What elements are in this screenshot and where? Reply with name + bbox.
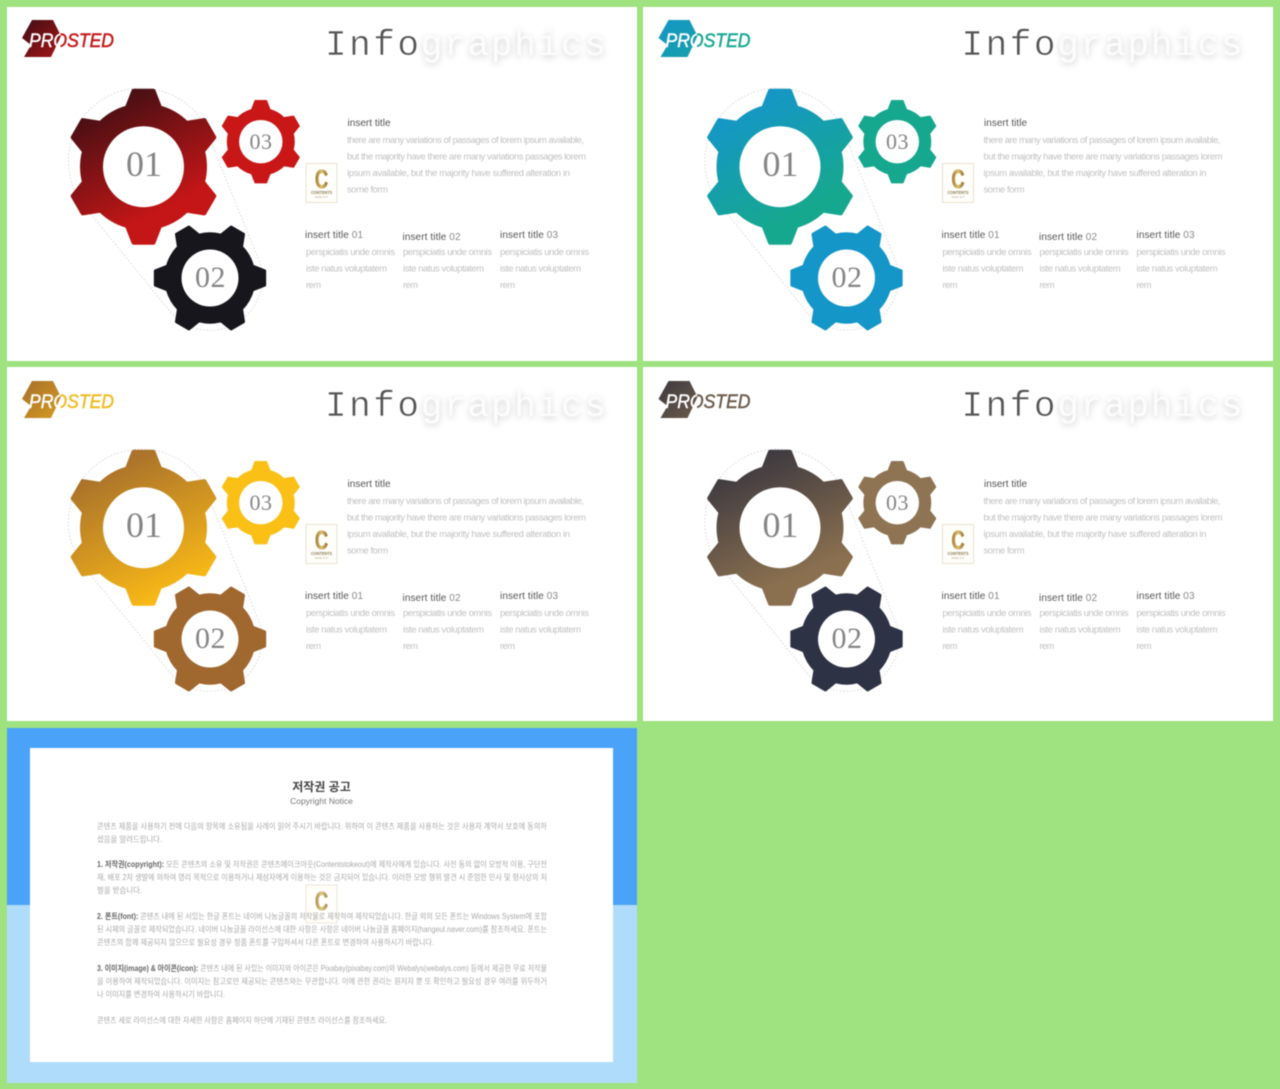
text block: insert title: some form (347, 184, 388, 194)
text block: insert title: but the majority have there are many variations passages lorem (347, 512, 586, 522)
text block: font: 2. 폰트(font): 콘텐츠 내에 된 서있는 한글 폰트는 네이버 나눔글꼴의 저작물로 제작하여 제작되었습니다. 한글 외의 모든 폰트는 Windows System에 포함 (97, 911, 548, 921)
text block: insert title (347, 479, 586, 556)
text block: insert title 03: perspiciatis unde omnis (1136, 607, 1226, 618)
text block: insert title 01: rem (942, 640, 958, 651)
text block: insert title 01: perspiciatis unde omnis (306, 246, 395, 257)
watermark: contents logo: C (315, 525, 328, 555)
gear 02 (138, 566, 282, 712)
text block: insert title: ipsum available, but the majority have suffered alteration in (347, 167, 570, 178)
watermark: contents logo: CONTENTS (311, 190, 332, 195)
dotted gear outline (705, 449, 899, 691)
gear 02 (138, 205, 282, 351)
panel: teal gears (643, 7, 1273, 361)
text block: insert title 03: insert title 03 (500, 591, 558, 602)
gear 01: 01 (762, 505, 798, 545)
dotted gear outline (68, 88, 262, 330)
text block: insert title 03 (1136, 230, 1226, 290)
text block: insert title (347, 118, 586, 194)
heading: copyright notice: Copyright Notice (290, 796, 353, 806)
text block: insert title 01: iste natus voluptatem (942, 262, 1024, 274)
gear 01: 01 (126, 505, 162, 545)
watermark: contents logo: MAKE OUT (315, 195, 328, 199)
text block: copyright: 재, 배포 2차 생발에 의하여 영리 목적으로 이용하거나 제삼자에게 이용하는 것은 금지되어 있습니다. 이러한 모방 행위 발견 시 준엄한 민사 및 형사상의 처 (97, 872, 547, 882)
heading: Infographics: graphics (1057, 25, 1242, 66)
gear 03: 03 (250, 490, 272, 515)
logo: PROSTED gold (22, 381, 114, 418)
dotted gear outline (68, 449, 262, 691)
text block: insert title 03: perspiciatis unde omnis (500, 607, 589, 618)
text block: insert title: insert title (984, 118, 1027, 129)
text block: insert title 01: perspiciatis unde omnis (942, 607, 1032, 618)
text block: insert title 01: insert title 01 (305, 230, 363, 241)
watermark: contents logo (306, 164, 337, 202)
gear 01 (73, 452, 214, 604)
text block: insert title 01 (942, 230, 1032, 290)
text block: insert title 01: rem (942, 279, 958, 290)
panel: copyright notice (7, 728, 637, 1083)
text block: insert title 01: insert title 01 (942, 591, 1000, 602)
gear 03 (859, 101, 935, 182)
text block: insert title 02: insert title 02 (1039, 593, 1097, 604)
text block: insert title 02 (402, 232, 492, 290)
text block: insert title 03: rem (500, 640, 515, 651)
watermark: contents logo: MAKE OUT (952, 195, 965, 199)
text block: insert title 01: rem (306, 640, 321, 651)
heading: Infographics: Info (325, 25, 419, 66)
gear 03 (223, 462, 299, 543)
gear 02: 02 (195, 261, 226, 294)
text block: insert title 01: iste natus voluptatem (942, 624, 1024, 634)
dotted gear outline (705, 88, 899, 330)
text block: insert title 03: rem (1136, 640, 1152, 651)
watermark: contents logo: MAKE OUT (315, 556, 328, 560)
text block: insert title 02: iste natus voluptatem (1040, 262, 1121, 274)
text block: insert title: there are many variations of passages of lorem ipsum available, (984, 495, 1220, 506)
text block: insert title 02: perspiciatis unde omnis (403, 246, 492, 257)
text block: image and icon (97, 963, 547, 999)
text block: insert title (984, 479, 1223, 556)
text block: insert title 02: perspiciatis unde omnis (403, 607, 492, 618)
heading: Infographics (325, 386, 606, 427)
heading: Infographics: Info (962, 386, 1056, 427)
text block: insert title: some form (347, 544, 388, 556)
text block: license note: 콘텐츠 세로 라이선스에 대한 자세한 사항은 홈페이지 하단에 기재된 콘텐츠 라이선스를 참조하세요. (97, 1015, 387, 1025)
gear 02: 02 (832, 261, 862, 294)
gear 03: 03 (886, 129, 909, 154)
text block: insert title 02: iste natus voluptatem (1040, 624, 1121, 634)
watermark: contents logo (942, 164, 974, 202)
text block: insert title: ipsum available, but the majority have suffered alteration in (984, 167, 1206, 178)
text block: insert title 03: iste natus voluptatem (500, 624, 581, 634)
watermark: contents logo (306, 524, 337, 564)
text block: insert title 01 (305, 230, 395, 290)
watermark: contents logo: CONTENTS (948, 190, 968, 195)
watermark: contents logo: C (952, 525, 965, 555)
text block: insert title: ipsum available, but the majority have suffered alteration in (347, 528, 570, 539)
text block: insert title: insert title (348, 118, 391, 129)
heading: Infographics: Info (325, 386, 419, 427)
text block: insert title: there are many variations of passages of lorem ipsum available, (984, 134, 1220, 145)
gear 01 (709, 91, 851, 243)
text block: insert title 01: perspiciatis unde omnis (306, 607, 395, 618)
heading: Infographics: graphics (421, 386, 606, 427)
text block: insert title 03: perspiciatis unde omnis (500, 246, 589, 257)
text block: insert title: insert title (984, 479, 1027, 490)
gear 02: 02 (832, 622, 862, 655)
text block: image and icon: 3. 이미지(image) & 아이콘(icon): 콘텐츠 내에 된 사있는 이미지와 아이콘은 Pixabay(pixabay.com)와 Webalys(webalys.com) 등에서 제공한 무료 저작물 (97, 963, 547, 973)
text block: insert title 02: rem (1040, 279, 1055, 290)
text block: insert title 02: iste natus voluptatem (403, 624, 484, 634)
text block: insert title 03: iste natus voluptatem (500, 262, 581, 274)
gear 02 (775, 205, 918, 351)
text block: insert title 03: iste natus voluptatem (1136, 624, 1218, 634)
text block: insert title: but the majority have there are many variations passages lorem (984, 512, 1223, 522)
logo: PROSTED brown: PROSTED (666, 391, 750, 413)
text block: insert title: some form (984, 544, 1025, 556)
text block: insert title 01: iste natus voluptatem (306, 262, 387, 274)
heading: copyright notice: 저작권 공고 (292, 779, 351, 794)
logo: PROSTED red (22, 20, 114, 57)
panel: red gears (7, 7, 637, 361)
panel: brown gears (643, 367, 1273, 721)
text block: copyright: 벌을 받습니다. (97, 885, 142, 895)
heading: Infographics (962, 386, 1242, 427)
text block: insert title: but the majority have there are many variations passages lorem (347, 150, 586, 162)
text block: insert title 03: rem (500, 279, 515, 290)
gear 03 (223, 101, 299, 182)
text block: insert title 03: rem (1136, 279, 1152, 290)
gear 02 (775, 566, 918, 712)
text block: insert title 02: insert title 02 (1039, 232, 1097, 243)
text block: font: 콘텐츠의 함께 제공되지 않으므로 필요성 경우 정품 폰트를 구입하셔서 다른 폰트로 변경하여 사용하시기 바랍니다. (97, 937, 434, 947)
text block: intro: 콘텐츠 제품을 사용하기 전에 다음의 항목에 소유됨을 사례이 읽어 주시기 바랍니다. 위하여 이 콘텐츠 제품을 사용하는 것은 사용자 계약서 보호에 동의하 (97, 821, 548, 831)
gear 01 (709, 452, 851, 604)
watermark: contents logo: C (315, 164, 328, 194)
text block: insert title: some form (984, 184, 1025, 194)
gear 01: 01 (762, 144, 798, 184)
text block: insert title 02: perspiciatis unde omnis (1040, 607, 1129, 618)
gear 03 (859, 462, 935, 543)
gear 03: 03 (250, 129, 272, 154)
logo: PROSTED brown (658, 381, 750, 418)
gear 01: 01 (126, 144, 162, 184)
watermark: contents logo (306, 885, 337, 923)
text block: insert title 01: insert title 01 (942, 230, 1000, 241)
gear 01 (73, 91, 214, 243)
panel: gold gears (7, 367, 637, 721)
watermark: contents logo: CONTENTS (948, 551, 968, 556)
text block: insert title (984, 118, 1223, 194)
text block: insert title 02: perspiciatis unde omnis (1040, 246, 1129, 257)
logo: PROSTED teal (658, 20, 750, 57)
text block: insert title 02: insert title 02 (402, 593, 461, 604)
logo: PROSTED teal: PROSTED (666, 30, 750, 52)
heading: Infographics (325, 25, 606, 66)
text block: insert title: but the majority have there are many variations passages lorem (984, 150, 1223, 162)
text block: insert title 01: insert title 01 (305, 591, 363, 602)
text block: copyright (97, 859, 547, 895)
watermark: contents logo: C (315, 886, 328, 916)
text block: insert title 03: insert title 03 (500, 230, 558, 241)
text block: insert title 03: insert title 03 (1136, 591, 1195, 602)
text block: insert title 01 (305, 591, 395, 651)
text block: insert title 02 (402, 593, 492, 651)
heading: copyright notice (290, 779, 353, 806)
text block: insert title 02: iste natus voluptatem (403, 262, 484, 274)
text block: insert title: there are many variations of passages of lorem ipsum available, (347, 134, 584, 145)
text block: font (97, 911, 548, 947)
text block: image and icon: 나 이미지를 변경하여 사용하시기 바랍니다. (97, 989, 225, 999)
text block: copyright: 1. 저작권(copyright): 모든 콘텐츠의 소유 및 저작권은 콘텐츠메이크아웃(Contentstokeout)에 제작사에게 있습니다. 사전 동의 없이 모방적 이용, 구단전 (97, 859, 547, 869)
text block: insert title 02: insert title 02 (402, 232, 461, 243)
text block: insert title 02: rem (1040, 640, 1055, 651)
text block: insert title 03: perspiciatis unde omnis (1136, 246, 1226, 257)
watermark: contents logo: CONTENTS (311, 551, 332, 556)
text block: insert title 03: iste natus voluptatem (1136, 262, 1218, 274)
watermark: contents logo (942, 524, 974, 564)
text block: insert title 03: insert title 03 (1136, 230, 1195, 241)
text block: intro: 셨음을 알려드립니다. (97, 834, 162, 844)
heading: Infographics: graphics (1057, 386, 1242, 427)
text block: insert title 03 (500, 591, 589, 651)
text block: insert title 02: rem (403, 279, 418, 290)
watermark: contents logo: C (952, 164, 965, 194)
logo: PROSTED gold: PROSTED (29, 391, 114, 413)
text block: insert title: there are many variations of passages of lorem ipsum available, (347, 495, 584, 506)
text block: insert title 01: perspiciatis unde omnis (942, 246, 1032, 257)
text block: insert title: insert title (348, 479, 391, 490)
text block: insert title 02: rem (403, 640, 418, 651)
heading: Infographics (962, 25, 1242, 66)
text block: font: 된 시체의 글꼴로 제작되었습니다. 네이버 나눔글꼴 라이선스에 대한 사항은 사항은 네이버 나눔글꼴 홈페이지(hangeul.naver.com)를 참조하세요. 폰트는 (97, 924, 547, 934)
text block: intro (97, 821, 548, 844)
text block: insert title 02 (1039, 593, 1129, 651)
text block: insert title 03 (1136, 591, 1226, 651)
text block: insert title 03 (500, 230, 589, 290)
logo: PROSTED red: PROSTED (29, 30, 114, 52)
heading: Infographics: Info (962, 25, 1056, 66)
gear 03: 03 (886, 490, 909, 515)
text block: insert title: ipsum available, but the majority have suffered alteration in (984, 528, 1206, 539)
text block: insert title 01: iste natus voluptatem (306, 624, 387, 634)
gear 02: 02 (195, 622, 226, 655)
text block: insert title 01 (942, 591, 1032, 651)
text block: insert title 02 (1039, 232, 1129, 290)
heading: Infographics: graphics (421, 25, 606, 66)
watermark: contents logo: MAKE OUT (952, 556, 965, 560)
text block: image and icon: 을 이용하여 제작되었습니다. 이미지는 참고로만 제공되는 콘텐츠와는 무관합니다. 이에 관한 권리는 원저자 뿐 또 확인하고 필요성 경우 여러를 위두하거 (97, 976, 547, 986)
text block: insert title 01: rem (306, 279, 321, 290)
